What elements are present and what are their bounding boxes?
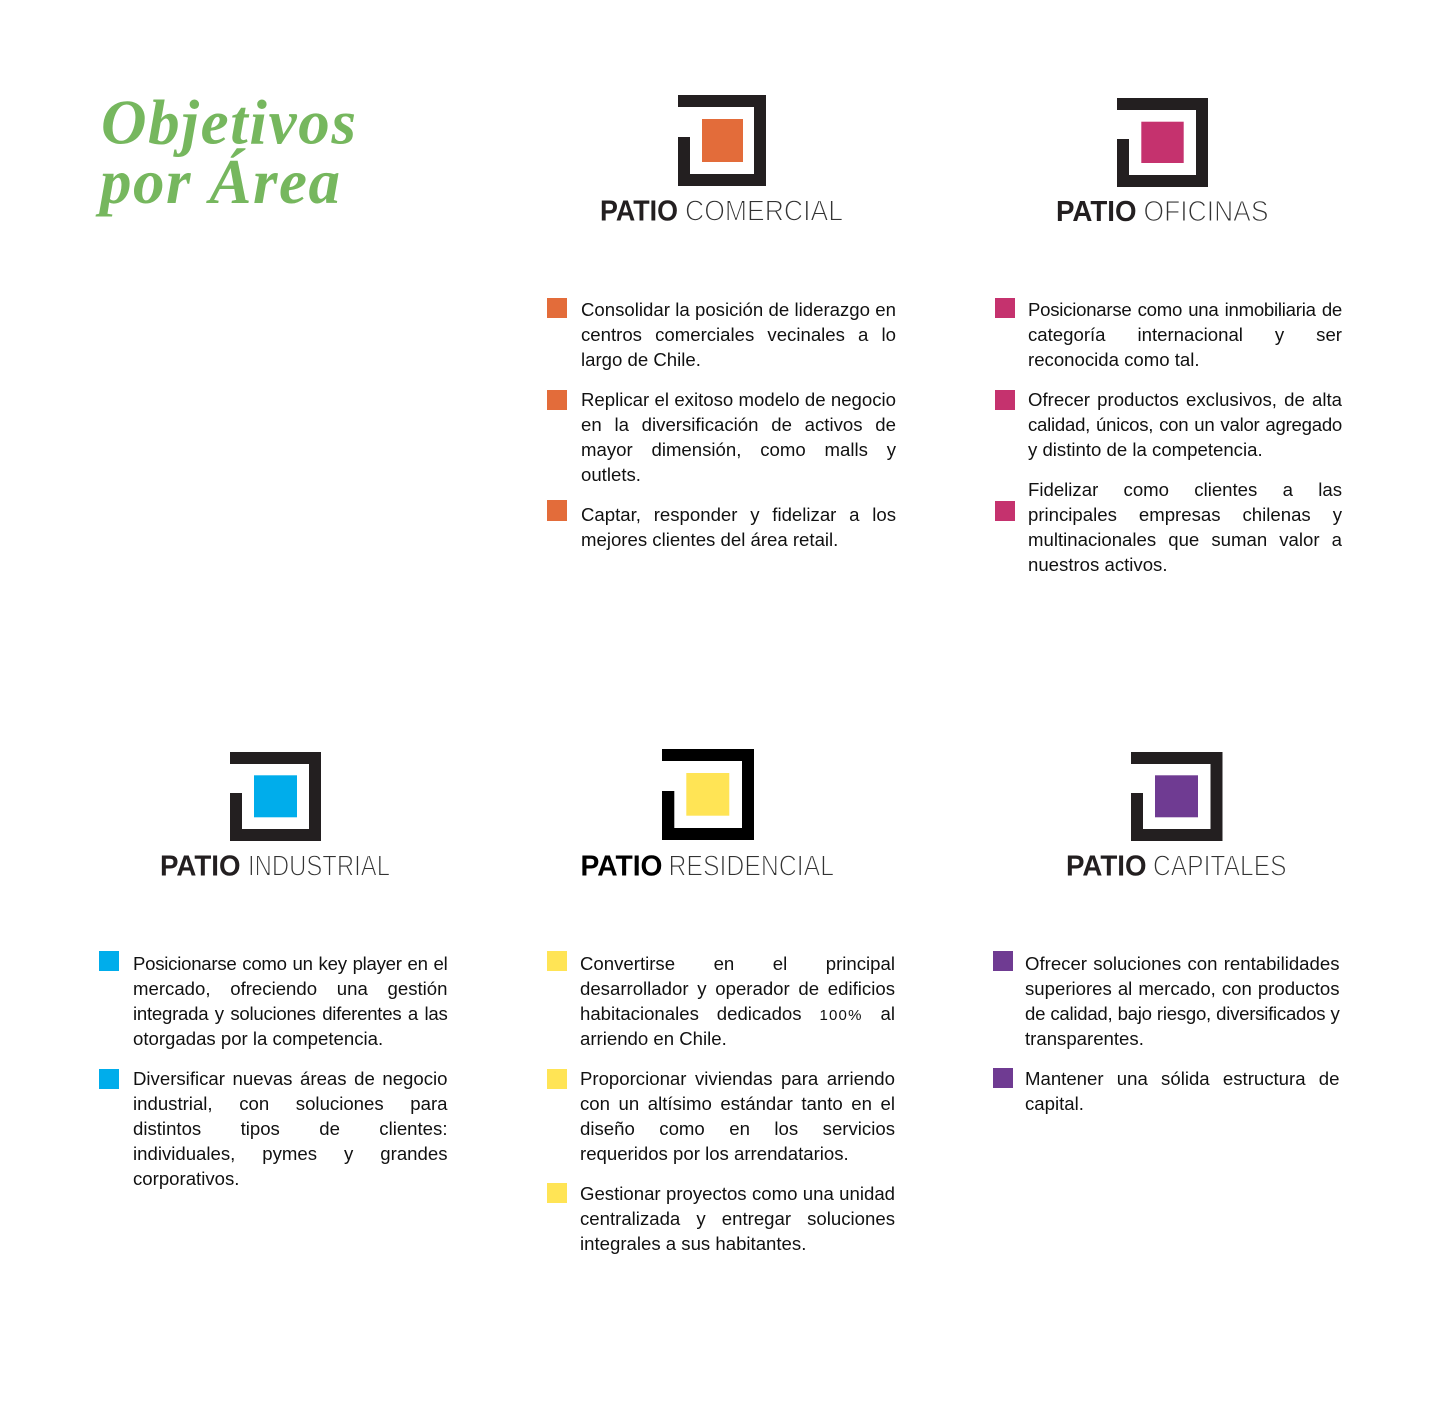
objective: liderazgo en centros comerciales	[547, 298, 896, 370]
logo: Patio Industrial: PATIO	[160, 850, 240, 882]
objective: liderazgo en centros comerciales: Consolidar la posición de liderazgo en	[581, 299, 896, 320]
logo: Patio Residencial: RESIDENCIAL	[668, 850, 834, 882]
objective: inmobiliaria de categoría internacional: categoría internacional y ser	[1028, 324, 1342, 345]
objective: viviendas para arriendo: con un altísimo estándar tanto en el	[580, 1093, 895, 1114]
objective: soluciones con rentabilidades	[993, 951, 1340, 1049]
logo: Patio Comercial: PATIO	[600, 196, 678, 228]
objective: soluciones con rentabilidades: superiores al mercado, con productos	[1025, 978, 1340, 999]
objective: fidelizar clientes retail: mejores clientes del área retail.	[581, 529, 838, 550]
objective: key player: otorgadas por la competencia.	[133, 1028, 383, 1049]
panel: Patio Oficinas	[995, 98, 1342, 575]
objective: principal desarrollador: desarrollador y operador de edificios	[580, 978, 895, 999]
objective: soluciones con rentabilidades: transparentes.	[1025, 1028, 1144, 1049]
objective: productos exclusivos	[995, 389, 1342, 460]
objective: diversificar áreas de negocio	[99, 1068, 448, 1189]
logo: Patio Capitales	[1066, 752, 1286, 882]
objective: viviendas para arriendo	[547, 1068, 895, 1164]
objective: sólida estructura de capital: capital.	[1025, 1093, 1084, 1114]
objective: key player: mercado, ofreciendo una gestión	[133, 978, 448, 999]
objective: fidelizar clientes retail	[547, 500, 896, 550]
objective: diversificar áreas de negocio: industrial, con soluciones para	[133, 1093, 448, 1114]
objective: sólida estructura de capital	[993, 1068, 1340, 1114]
logo: Patio Oficinas: PATIO	[1056, 196, 1136, 228]
objective: fidelizar empresas: nuestros activos.	[1028, 554, 1168, 575]
objective: diversificar áreas de negocio: individuales, pymes y grandes	[133, 1143, 448, 1164]
objective: fidelizar empresas: principales empresas chilenas y	[1028, 504, 1342, 525]
title	[95, 88, 356, 217]
objective: key player: integrada y soluciones diferentes a las	[133, 1003, 448, 1024]
objective: key player	[99, 951, 448, 1049]
objective: diversificar áreas de negocio: corporativos.	[133, 1168, 239, 1189]
objective: inmobiliaria de categoría internacional	[995, 298, 1342, 370]
objective: inmobiliaria de categoría internacional: reconocida como tal.	[1028, 349, 1200, 370]
objective: principal desarrollador: arriendo en Chile.	[580, 1028, 727, 1049]
logo: Patio Capitales: CAPITALES	[1153, 850, 1286, 882]
objective: proyectos como unidad centralizada	[547, 1183, 895, 1254]
objective: principal desarrollador: habitacionales dedicados 100% al	[580, 1003, 895, 1024]
logo: Patio Comercial	[600, 95, 843, 228]
panel: Patio Comercial	[547, 95, 896, 550]
objective: soluciones con rentabilidades: Ofrecer soluciones con rentabilidades	[1025, 953, 1340, 974]
objective: proyectos como unidad centralizada: Gestionar proyectos como una unidad	[580, 1183, 895, 1204]
objective: replicar modelo de negocio: mayor dimensión, como malls y	[581, 439, 896, 460]
objective: replicar modelo de negocio: en la diversificación de activos de	[581, 414, 896, 435]
logo: Patio Comercial: COMERCIAL	[685, 196, 843, 228]
objective: viviendas para arriendo: diseño como en los servicios	[580, 1118, 895, 1139]
logo: Patio Capitales: PATIO	[1066, 850, 1146, 882]
objective: fidelizar empresas: multinacionales que suman valor a	[1028, 529, 1342, 550]
panel: Patio Industrial	[99, 752, 448, 1189]
objective: fidelizar empresas	[995, 479, 1342, 575]
objective: replicar modelo de negocio: Replicar el exitoso modelo de negocio	[581, 389, 896, 410]
objective: productos exclusivos: Ofrecer productos exclusivos, de alta	[1028, 389, 1342, 410]
objective: fidelizar empresas: Fidelizar como clientes a las	[1028, 479, 1342, 500]
objective: fidelizar clientes retail: Captar, responder y fidelizar a los	[581, 504, 896, 525]
objective: diversificar áreas de negocio: distintos tipos de clientes:	[133, 1118, 448, 1139]
objective: sólida estructura de capital: Mantener una sólida estructura de	[1025, 1068, 1340, 1089]
objective: liderazgo en centros comerciales: centros comerciales vecinales a lo	[581, 324, 896, 345]
objective: diversificar áreas de negocio: Diversificar nuevas áreas de negocio	[133, 1068, 448, 1089]
panel: Patio Capitales	[993, 752, 1340, 1114]
logo: Patio Oficinas: OFICINAS	[1144, 196, 1268, 228]
panel: Patio Residencial	[547, 749, 895, 1254]
objective: viviendas para arriendo: Proporcionar viviendas para arriendo	[580, 1068, 895, 1089]
objective: productos exclusivos: y distinto de la competencia.	[1028, 439, 1263, 460]
title: Objetivos	[101, 88, 356, 158]
objective: viviendas para arriendo: requeridos por los arrendatarios.	[580, 1143, 849, 1164]
logo: Patio Industrial	[160, 752, 390, 882]
objective: inmobiliaria de categoría internacional: Posicionarse como una inmobiliaria de	[1028, 299, 1342, 320]
objective: principal desarrollador	[547, 951, 895, 1049]
title: por Área	[95, 147, 340, 217]
objective: key player: Posicionarse como un key player en el	[133, 953, 448, 974]
objective: principal desarrollador: Convertirse en el principal	[580, 953, 895, 974]
logo: Patio Residencial	[580, 749, 834, 882]
objective: proyectos como unidad centralizada: centralizada y entregar soluciones	[580, 1208, 895, 1229]
logo: Patio Residencial: PATIO	[580, 850, 662, 882]
objective: replicar modelo de negocio	[547, 389, 896, 485]
logo: Patio Industrial: INDUSTRIAL	[248, 850, 390, 882]
objective: proyectos como unidad centralizada: integrales a sus habitantes.	[580, 1233, 806, 1254]
objective: soluciones con rentabilidades: de calidad, bajo riesgo, diversificados y	[1025, 1003, 1340, 1024]
logo: Patio Oficinas	[1056, 98, 1268, 228]
objective: productos exclusivos: calidad, únicos, con un valor agregado	[1028, 414, 1342, 435]
objective: replicar modelo de negocio: outlets.	[581, 464, 641, 485]
objective: liderazgo en centros comerciales: largo de Chile.	[581, 349, 701, 370]
